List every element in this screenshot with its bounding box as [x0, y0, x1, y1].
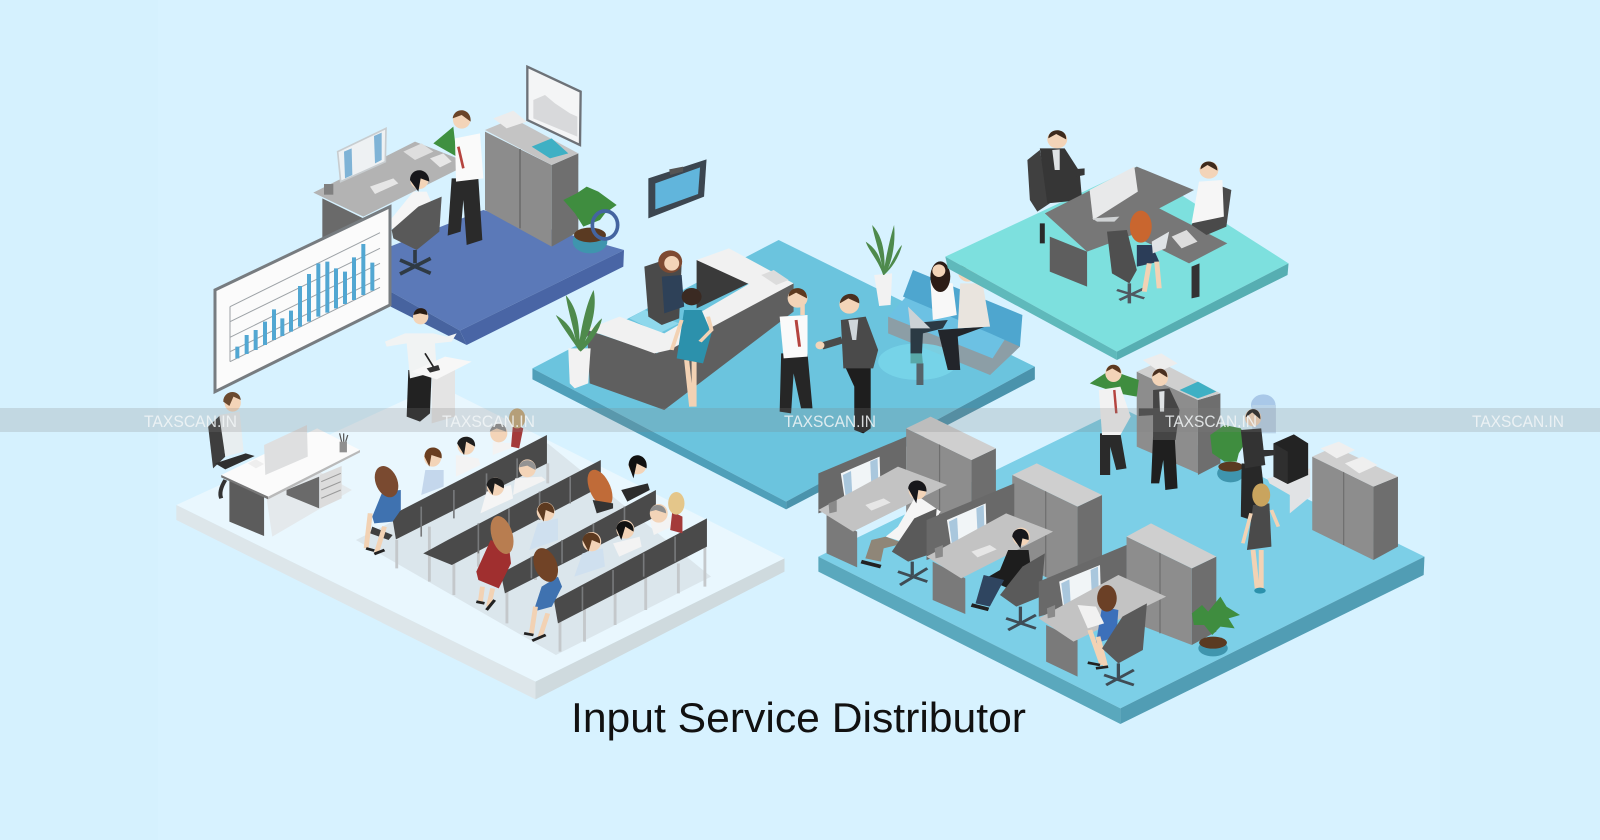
desk with monitor [313, 127, 470, 257]
chair rows [370, 435, 707, 652]
seated audience [366, 408, 684, 641]
coffee station [1267, 434, 1310, 513]
potted plant by sofa [866, 225, 902, 306]
potted plant and ring [563, 187, 618, 253]
title: Input Service Distributor [571, 694, 1026, 741]
watermark text row: TAXSCAN.IN [144, 412, 237, 431]
cabinet with picture [485, 67, 581, 247]
manager in chair [1027, 130, 1085, 243]
watermark text row: TAXSCAN.IN [1472, 412, 1564, 431]
L-shaped desk [1045, 167, 1227, 298]
panel: cubicle office [818, 353, 1424, 724]
woman in teal dress [672, 288, 712, 407]
sofa and glass table [878, 270, 1022, 385]
cubicle 2 [927, 463, 1102, 630]
seated employee and chair [392, 170, 442, 274]
panel: reception and lounge [532, 159, 1035, 509]
man at coffee machine [1241, 409, 1276, 520]
cubicle 3 [1039, 523, 1216, 685]
blonde woman in grey dress [1243, 483, 1278, 594]
potted plant by counter [556, 290, 602, 388]
seated colleague right [1192, 161, 1231, 235]
platform [532, 240, 1035, 509]
man in dark suit [815, 294, 878, 433]
panel: meeting room on teal platform [945, 130, 1289, 360]
wall tablet [648, 159, 707, 218]
platform [390, 210, 624, 345]
receptionist [644, 250, 684, 325]
man in white shirt [780, 288, 812, 413]
reception desk with employee [208, 392, 360, 537]
cubicle 1 [818, 417, 996, 585]
plant and water cooler [1210, 394, 1276, 482]
whiteboard with bar chart [215, 207, 390, 392]
back cabinet and two men [1090, 353, 1220, 490]
watermark text row: TAXSCAN.IN [442, 412, 535, 431]
watermark text row: TAXSCAN.IN [1165, 412, 1257, 431]
reception counter [587, 248, 794, 410]
platform [818, 408, 1424, 724]
watermark text row: TAXSCAN.IN [784, 412, 876, 431]
platform [176, 385, 784, 699]
watermark band [0, 408, 1600, 432]
panel: seminar room on white platform [176, 385, 784, 699]
panel: top-left office on blue platform [215, 67, 624, 423]
platform [945, 167, 1289, 360]
woman with red hair in chair [1107, 211, 1198, 303]
potted plant bottom [1192, 597, 1240, 656]
filing cabinet right [1312, 442, 1398, 560]
watermark text row [144, 412, 1564, 431]
presenter at podium [385, 308, 472, 423]
couple on the sofa [908, 261, 990, 370]
standing man in white shirt [448, 110, 483, 245]
